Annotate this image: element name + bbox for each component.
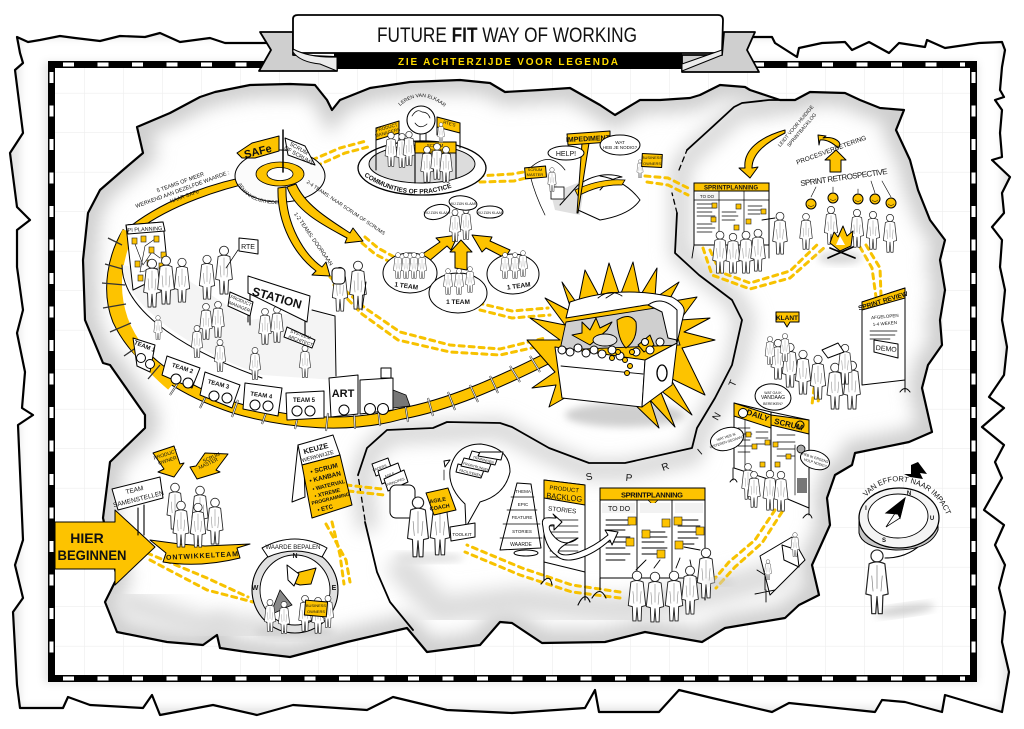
hikers: [332, 261, 366, 311]
title banner: [259, 15, 759, 72]
S P R I N T letters: [585, 379, 740, 484]
team ellipses: 1 TEAM: [446, 299, 470, 306]
product managers sign: PRODUCT: [375, 122, 398, 133]
backlog pyramid: EPIC: [518, 502, 529, 507]
sprintplanning board top: [692, 183, 769, 258]
keuze werkwijze sign: [292, 435, 352, 518]
people at board top: [713, 212, 787, 273]
scrum master person and tag: MASTER: [527, 172, 543, 177]
question bubble: WAT: [615, 140, 625, 145]
signposts: SAFe and scrum of scrums: OF SCRUMS: [283, 145, 315, 167]
wagon team 4: [243, 383, 282, 416]
film strip frame: [52, 64, 974, 678]
keuze werkwijze sign: • XTREME: [314, 488, 341, 500]
backlog pyramid: FEATURE: [512, 515, 532, 520]
scrum master arrow: [190, 451, 228, 479]
daily scrum bubbles: WAT GA IK: [764, 391, 782, 395]
wagon team 5: TEAM 5: [293, 398, 316, 404]
keuze werkwijze sign: KEUZE: [302, 441, 329, 456]
railway track: [102, 232, 548, 431]
wagon team 1: [133, 338, 156, 372]
scrum masters gate: [415, 142, 456, 183]
product managers sign: MANAGERS: [375, 127, 401, 138]
ribbon front: [293, 15, 723, 53]
signposts: SAFe and scrum of scrums: SCRUM: [288, 141, 309, 157]
scrum master arrow: SCRUM: [202, 451, 221, 465]
hier beginnen arrow: BEGINNEN: [58, 547, 126, 563]
globe: [407, 106, 435, 148]
sprintplanning board large: TO DO: [608, 506, 631, 513]
sprintplanning board top: TO DO: [700, 194, 715, 199]
SAFe plaza: [234, 150, 326, 204]
subtitle: ZIE ACHTERZIJDE VOOR LEGENDA: [398, 57, 618, 68]
wagon team 2: [162, 356, 200, 388]
S P R I N T letters: R: [660, 461, 671, 474]
curved yellow arrow to sprintplanning: [739, 130, 785, 178]
business owners person and tag: BUSINESS: [642, 155, 662, 160]
sprintplanning board large: [592, 488, 705, 600]
daily scrum bubbles: VANDAAG: [761, 395, 785, 401]
central leaders: [449, 207, 472, 241]
hier beginnen arrow: [55, 510, 155, 585]
train: team wagons and locomotive: [133, 338, 410, 420]
RTE sign: RTE'S: [443, 119, 456, 128]
scrum master person and tag: SCRUM: [528, 167, 542, 172]
left ribbon tail: [259, 32, 337, 71]
people at large sprintplanning board: [628, 547, 734, 622]
backlog pyramid: WAARDE: [510, 542, 533, 548]
keuze werkwijze sign: • WATERVAL: [312, 479, 347, 493]
business owners person and tag: OWNERS: [643, 161, 661, 166]
team samenstellen sign: SAMENSTELLEN: [113, 490, 165, 509]
help bubble: HELP!: [556, 151, 576, 158]
product manager sign: PRODUCT: [230, 294, 252, 307]
business owners tag: OWNERS: [307, 609, 325, 614]
speech bubble: FRONTRUNNEN: [463, 462, 490, 473]
ART locomotive: [329, 368, 410, 417]
product backlog board: [541, 480, 590, 605]
question bubble: [600, 135, 640, 155]
product owner arrow: OWNER: [158, 455, 178, 467]
toolkit box: TOOLKIT: [452, 532, 472, 537]
product owner arrow: PRODUCT: [153, 448, 178, 462]
wagon team 4: TEAM 4: [250, 392, 273, 401]
scrum label: SCRUM: [773, 417, 804, 433]
ribbon left fold: [293, 49, 337, 71]
papers: AGILE: [384, 471, 396, 479]
team ellipses: [383, 251, 539, 313]
business owners tag: BUSINESS: [306, 603, 326, 608]
communities of practice text: COMMUNITIES OF PRACTICE: [365, 173, 452, 194]
daily scrum board: [730, 403, 812, 518]
label: leidt voor huidige sprintbacklog: LEIDT VOOR HUIDIGE: [777, 104, 816, 148]
swirl arrow from backlog to planning: [542, 514, 618, 560]
ART locomotive: ART: [332, 388, 355, 400]
chest lid: [566, 292, 684, 343]
ontwikkelteam banner with team: [150, 483, 250, 564]
systeem architect sign: [284, 327, 315, 348]
team samenstellen sign: [112, 477, 165, 535]
product backlog board: STORIES: [548, 506, 577, 516]
agile coach shirt: AGILE: [429, 497, 447, 505]
arrows up: [418, 235, 510, 270]
main island: [83, 80, 945, 657]
systeem architect sign: SYSTEEM: [290, 329, 312, 341]
scrum master person and tag: [525, 166, 556, 192]
speech bubble: FACILITEREN: [459, 468, 482, 478]
label: leidt voor huidige sprintbacklog: SPRINTBACKLOG: [786, 112, 818, 149]
papers: PRINCIPES: [386, 477, 406, 487]
scrum masters gate: SCRUM: [427, 143, 444, 148]
signposts: SAFe and scrum of scrums: [237, 130, 315, 172]
keuze werkwijze sign: • ETC: [317, 504, 334, 514]
wagon team 1: TEAM 1: [133, 340, 156, 354]
label: 5 teams of meer: NAAR SAFe: [169, 189, 200, 205]
map area with grid: [52, 65, 973, 678]
people around PI planning: [144, 246, 311, 379]
scrum masters gate: MASTERS: [424, 148, 446, 153]
chest inner lid: [560, 306, 680, 350]
keuze werkwijze sign: WERKWIJZE: [301, 450, 335, 464]
daily scrum bubbles: GISTEREN GEDAAN?: [709, 435, 744, 449]
label: 1-2 teams doorgaan: 1-2 TEAMS: DOORGAAN: [292, 212, 333, 267]
three teams converging: [383, 194, 539, 313]
impediment sign: IMPEDIMENT: [566, 135, 611, 144]
compass waarde bepalen: N: [292, 553, 298, 560]
S P R I N T letters: P: [625, 473, 633, 484]
Communities of Practice: [357, 94, 487, 196]
daily scrum team: [742, 463, 788, 511]
speech bubbles: WIJ ZIJN KLAAR: [477, 211, 504, 215]
wagon team 5: [286, 391, 324, 420]
sprint review board: DEMO: [875, 345, 898, 354]
RTE sign: RTE: [241, 244, 255, 251]
scrum master arrow: MASTER: [198, 457, 220, 471]
backlog pyramid: [500, 483, 542, 556]
sprint review board: AFGELOPEN: [871, 313, 899, 320]
daily scrum bubbles: WAT HEB IK: [716, 432, 737, 442]
business owners tag: [304, 600, 328, 617]
keuze werkwijze sign: • KANBAN: [309, 470, 342, 485]
retrospective team around campfire: [800, 206, 897, 264]
curved label: VAN EFFORT NAAR IMPACT: [862, 476, 952, 514]
sprint review board: SPRINT REVIEW: [858, 290, 910, 312]
backlog pyramid: THEMA: [515, 489, 531, 494]
klant sign: [776, 312, 799, 327]
S P R I N T letters: I: [696, 447, 705, 457]
backlog pyramid: STORIES: [512, 529, 532, 534]
walkers: [408, 497, 450, 557]
sprint review board: 1-4 WEKEN: [873, 320, 897, 327]
leren van elkaar text: LEREN VAN ELKAAR: [398, 94, 446, 107]
RTE sign: [226, 238, 258, 268]
S P R I N T letters: N: [711, 411, 724, 423]
compass body: [859, 488, 939, 550]
product manager sign: [228, 292, 253, 322]
team ellipses: 1 TEAM: [506, 281, 531, 292]
station sign: [248, 276, 310, 335]
label: 5 teams of meer: 5 TEAMS OF MEER: [156, 172, 205, 194]
speech bubble: TRAININGEN: [472, 455, 495, 465]
S P R I N T letters: T: [727, 379, 740, 389]
communities people: [385, 123, 452, 182]
small arrows and procesverbetering: PROCESVERBETERING: [795, 135, 867, 167]
daily scrum bubbles: BEREIKEN?: [763, 402, 783, 406]
agile coach shirt: [426, 488, 456, 515]
smileys and retrospective arrows: [806, 181, 896, 209]
speech bubbles: [423, 194, 504, 222]
daily scrum bubbles: HEB IK ERGENS: [802, 452, 830, 464]
ontwikkelteam banner with team: ONTWIKKELTEAM: [166, 551, 238, 562]
chest body: [555, 347, 645, 407]
sprint retrospective title: SPRINT RETROSPECTIVE: [800, 167, 888, 188]
product managers sign: [375, 121, 401, 170]
product backlog board: BACKLOG: [546, 491, 583, 504]
papers: KADERS: [372, 463, 388, 472]
daily scrum bubbles: [707, 382, 832, 473]
sprintplanning board large: SPRINTPLANNING: [621, 490, 683, 500]
business owners person and tag: [637, 153, 662, 178]
ribbon right fold: [682, 50, 722, 71]
label: 5 teams of meer: WERKEND AAN DEZELFDE WAARDE :: [135, 170, 231, 210]
right ribbon tail: [682, 32, 759, 72]
sprint review board: [858, 288, 910, 392]
yellow footprint trails: [147, 141, 881, 602]
wagon team 2: TEAM 2: [171, 363, 194, 376]
station sign: STATION: [251, 284, 303, 312]
question bubble: HEB JE NODIG?: [603, 145, 638, 150]
papers: [372, 458, 408, 491]
treasure: coins and crown and cup: [558, 316, 664, 376]
agile coach shirt: COACH: [429, 503, 450, 513]
sprintplanning board top: SPRINTPLANNING: [704, 186, 758, 192]
yellow road from PI planning to plaza: [132, 173, 268, 230]
bottom right compass: van effort naar impact: [858, 462, 952, 620]
PI planning board: [126, 222, 168, 290]
arrow up: [904, 462, 927, 479]
speech bubble: [450, 444, 510, 527]
person holding compass: [866, 540, 925, 614]
PI planning board: PI PLANNING: [127, 226, 163, 234]
product owner arrow: [153, 446, 184, 477]
backpackers and agile coach: [372, 444, 510, 562]
people pushing compass: [264, 595, 334, 633]
signposts: SAFe and scrum of scrums: SAFe: [243, 143, 273, 161]
speech bubbles: WIJ ZIJN KLAAR: [424, 211, 451, 215]
compass body: N: [907, 491, 911, 497]
wagon team 3: TEAM 3: [207, 379, 230, 391]
impediment scene: [525, 131, 662, 220]
daily scrum bubbles: HULP NODIG?: [803, 457, 827, 469]
compass waarde bepalen: E: [332, 585, 337, 592]
hier beginnen arrow: HIER: [70, 530, 104, 546]
product manager sign: MANAGER: [228, 300, 252, 313]
flag: [444, 460, 450, 480]
S P R I N T letters: S: [585, 471, 594, 483]
compass waarde bepalen: W: [252, 585, 259, 592]
label: 2-4 teams: 2-4 TEAMS: NAAR SCRUM OF SCRUMS: [305, 180, 387, 237]
speech bubbles: WIJ ZIJN KLAAR: [450, 202, 477, 206]
compass body: I: [865, 506, 867, 512]
compass body: U: [930, 516, 934, 522]
backpack: [390, 485, 415, 518]
compass body: S: [882, 538, 886, 544]
plaza label: AFHANKELIJKHEDEN PLEIN: [238, 184, 278, 204]
systeem architect sign: ARCHITECT: [288, 334, 314, 347]
banner: WAARDE BEPALEN: [265, 545, 321, 551]
team samenstellen sign: TEAM: [125, 485, 144, 496]
review crowd: [765, 334, 860, 409]
klant sign: KLANT: [776, 315, 798, 322]
treasure chest with burst: [527, 262, 715, 428]
station platform: [122, 265, 336, 380]
product backlog board: PRODUCT: [549, 485, 580, 495]
yellow arrows from plaza to 1-2 and 2-4 teams: [278, 184, 363, 276]
title: FUTURE FIT WAY OF WORKING: [377, 24, 637, 47]
legenda bar: [334, 53, 682, 69]
burst rays: [527, 262, 715, 428]
wagon team 3: [200, 372, 240, 408]
keuze werkwijze sign: PROGRAMMING: [311, 492, 351, 507]
keuze werkwijze sign: • SCRUM: [310, 462, 339, 476]
daily label: DAILY: [745, 408, 771, 424]
compass waarde bepalen: [252, 539, 338, 638]
team ellipses: 1 TEAM: [394, 281, 419, 292]
office desk: [755, 533, 805, 602]
